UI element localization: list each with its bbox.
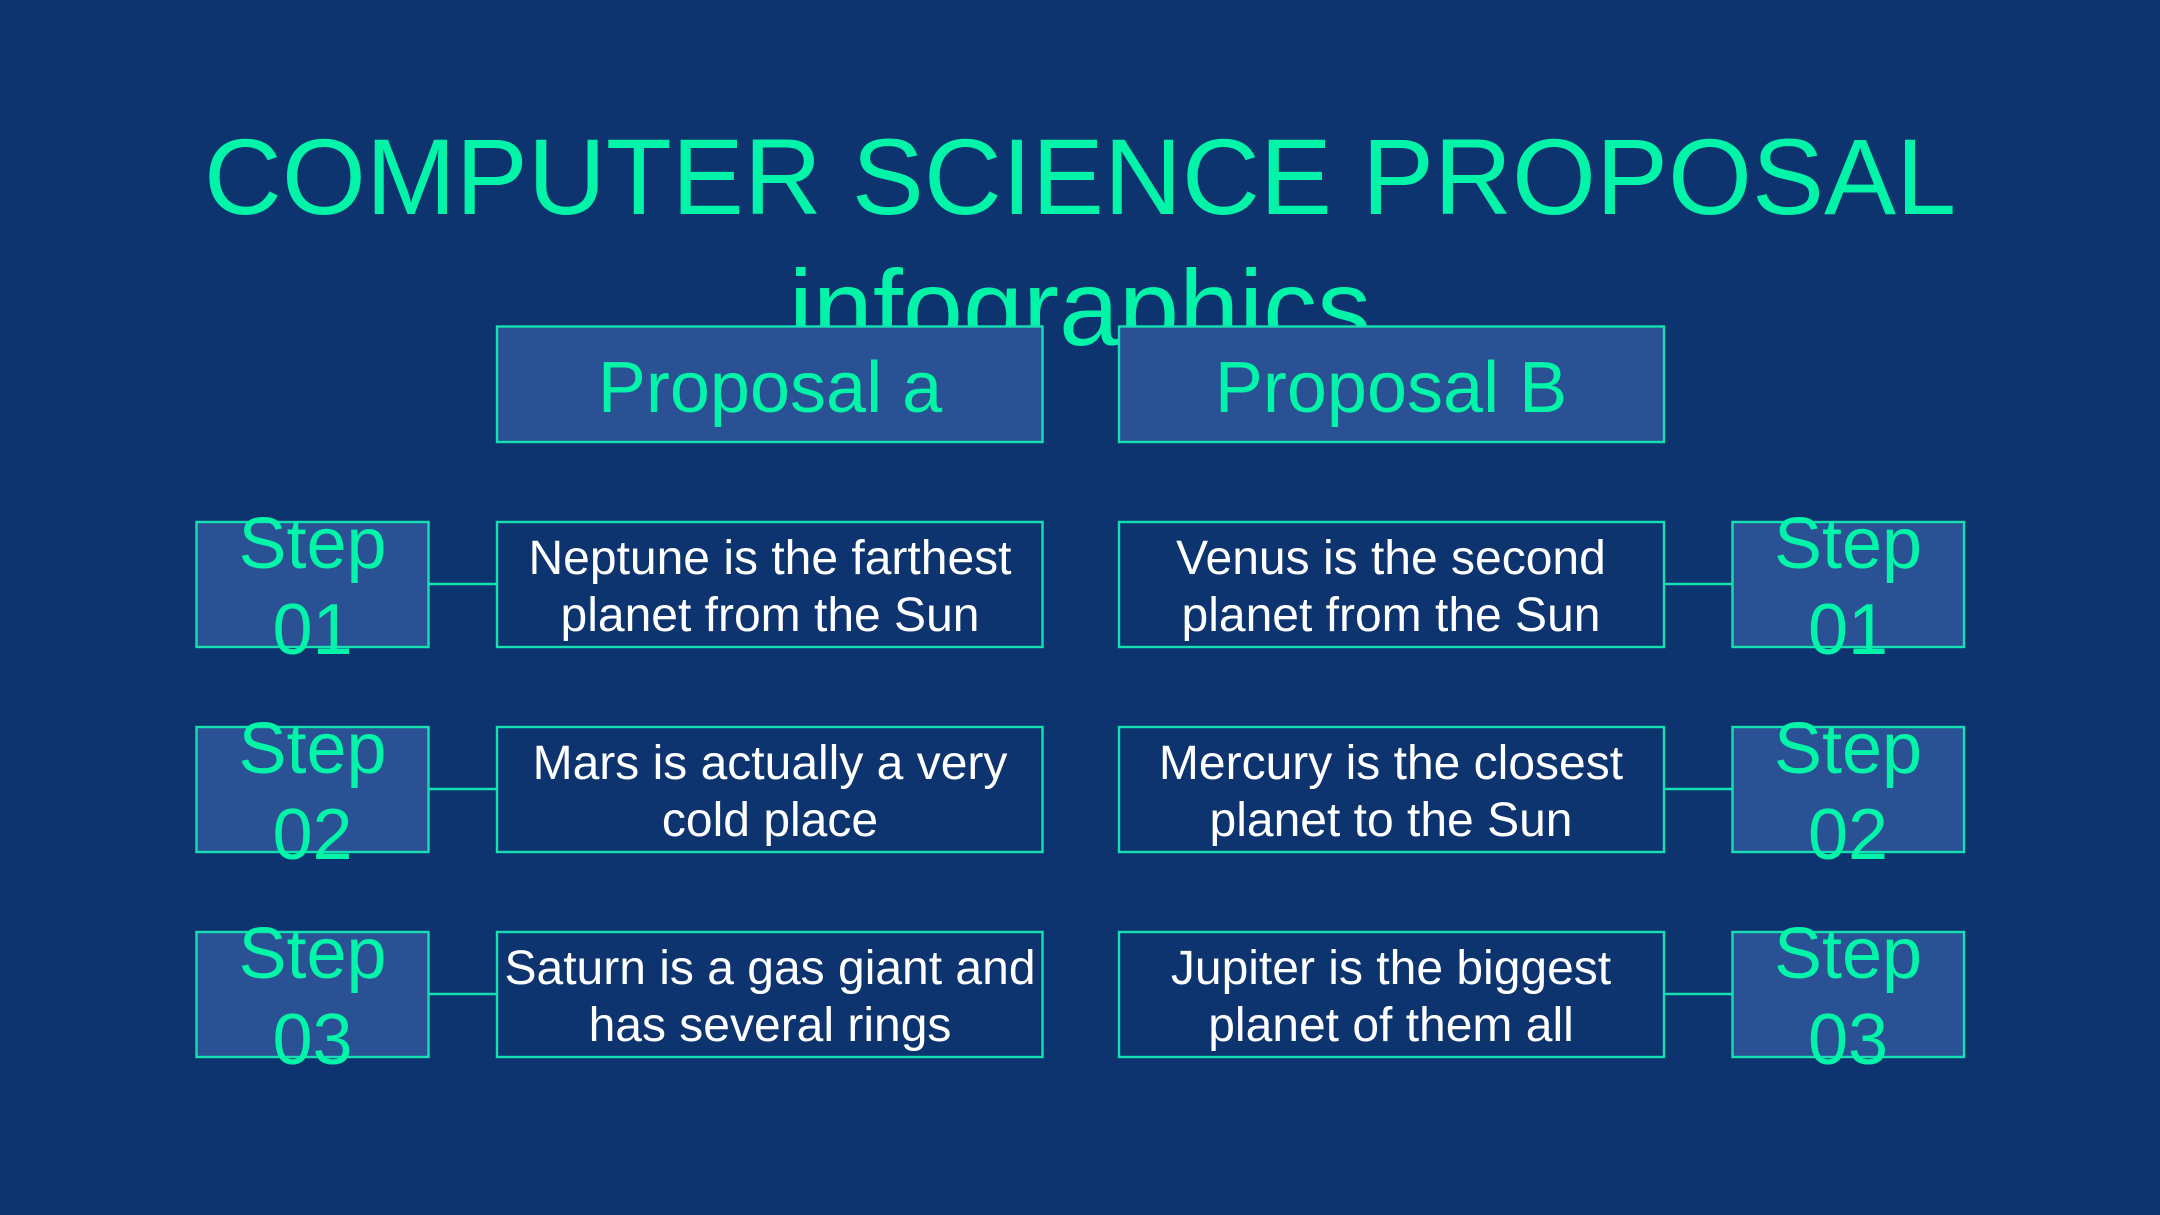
panel: right step 02: Step [1774, 709, 1922, 789]
title [204, 116, 1956, 368]
panel: left step 01 [196, 504, 428, 670]
text block: Neptune: Neptune is the farthest [529, 532, 1011, 585]
panel: right step 02: 02 [1808, 795, 1888, 875]
text block: Neptune [497, 522, 1042, 647]
panel: right step 01: Step [1774, 504, 1922, 584]
text block: Venus: planet from the Sun [1182, 589, 1600, 642]
connector: left step 01 [428, 583, 497, 585]
panel: left step 03: 03 [272, 1000, 353, 1080]
text block: Mars: cold place [662, 794, 878, 847]
text block: Saturn [497, 932, 1042, 1057]
text block: Mercury: planet to the Sun [1210, 794, 1572, 847]
text block: Mars [497, 727, 1042, 852]
text block: Neptune: planet from the Sun [561, 589, 979, 642]
connector: right step 03 [1664, 993, 1732, 995]
text block: Saturn: has several rings [589, 999, 951, 1052]
heading: Proposal B: Proposal B [1215, 348, 1567, 428]
panel: left step 03 [196, 914, 428, 1080]
panel: left step 03: Step [238, 914, 387, 994]
panel: right step 03: 03 [1808, 1000, 1888, 1080]
panel: left step 02: Step [238, 709, 387, 789]
connector: right step 01 [1664, 583, 1732, 585]
text block: Jupiter: planet of them all [1208, 999, 1574, 1052]
panel: right step 03: Step [1774, 914, 1922, 994]
heading: Proposal a: Proposal a [598, 348, 943, 428]
text block: Saturn: Saturn is a gas giant and [504, 942, 1036, 995]
panel: right step 01: 01 [1808, 590, 1888, 670]
heading: Proposal B [1119, 326, 1664, 442]
connector: left step 02 [428, 788, 497, 790]
panel: left step 02: 02 [272, 795, 353, 875]
text block: Venus: Venus is the second [1176, 532, 1606, 585]
panel: right step 03 [1732, 914, 1964, 1080]
title: COMPUTER SCIENCE PROPOSAL [204, 116, 1956, 237]
panel: left step 01: 01 [272, 590, 353, 670]
text block: Venus [1119, 522, 1664, 647]
panel: right step 02 [1732, 709, 1964, 875]
connector: left step 03 [428, 993, 497, 995]
text block: Mercury [1119, 727, 1664, 852]
text block: Mars: Mars is actually a very [533, 737, 1007, 790]
text block: Mercury: Mercury is the closest [1159, 737, 1623, 790]
title: infographics [789, 247, 1371, 368]
connector: right step 02 [1664, 788, 1732, 790]
text block: Jupiter: Jupiter is the biggest [1171, 942, 1611, 995]
panel: left step 02 [196, 709, 428, 875]
panel: left step 01: Step [238, 504, 387, 584]
text block: Jupiter [1119, 932, 1664, 1057]
heading: Proposal a [497, 326, 1042, 442]
panel: right step 01 [1732, 504, 1964, 670]
